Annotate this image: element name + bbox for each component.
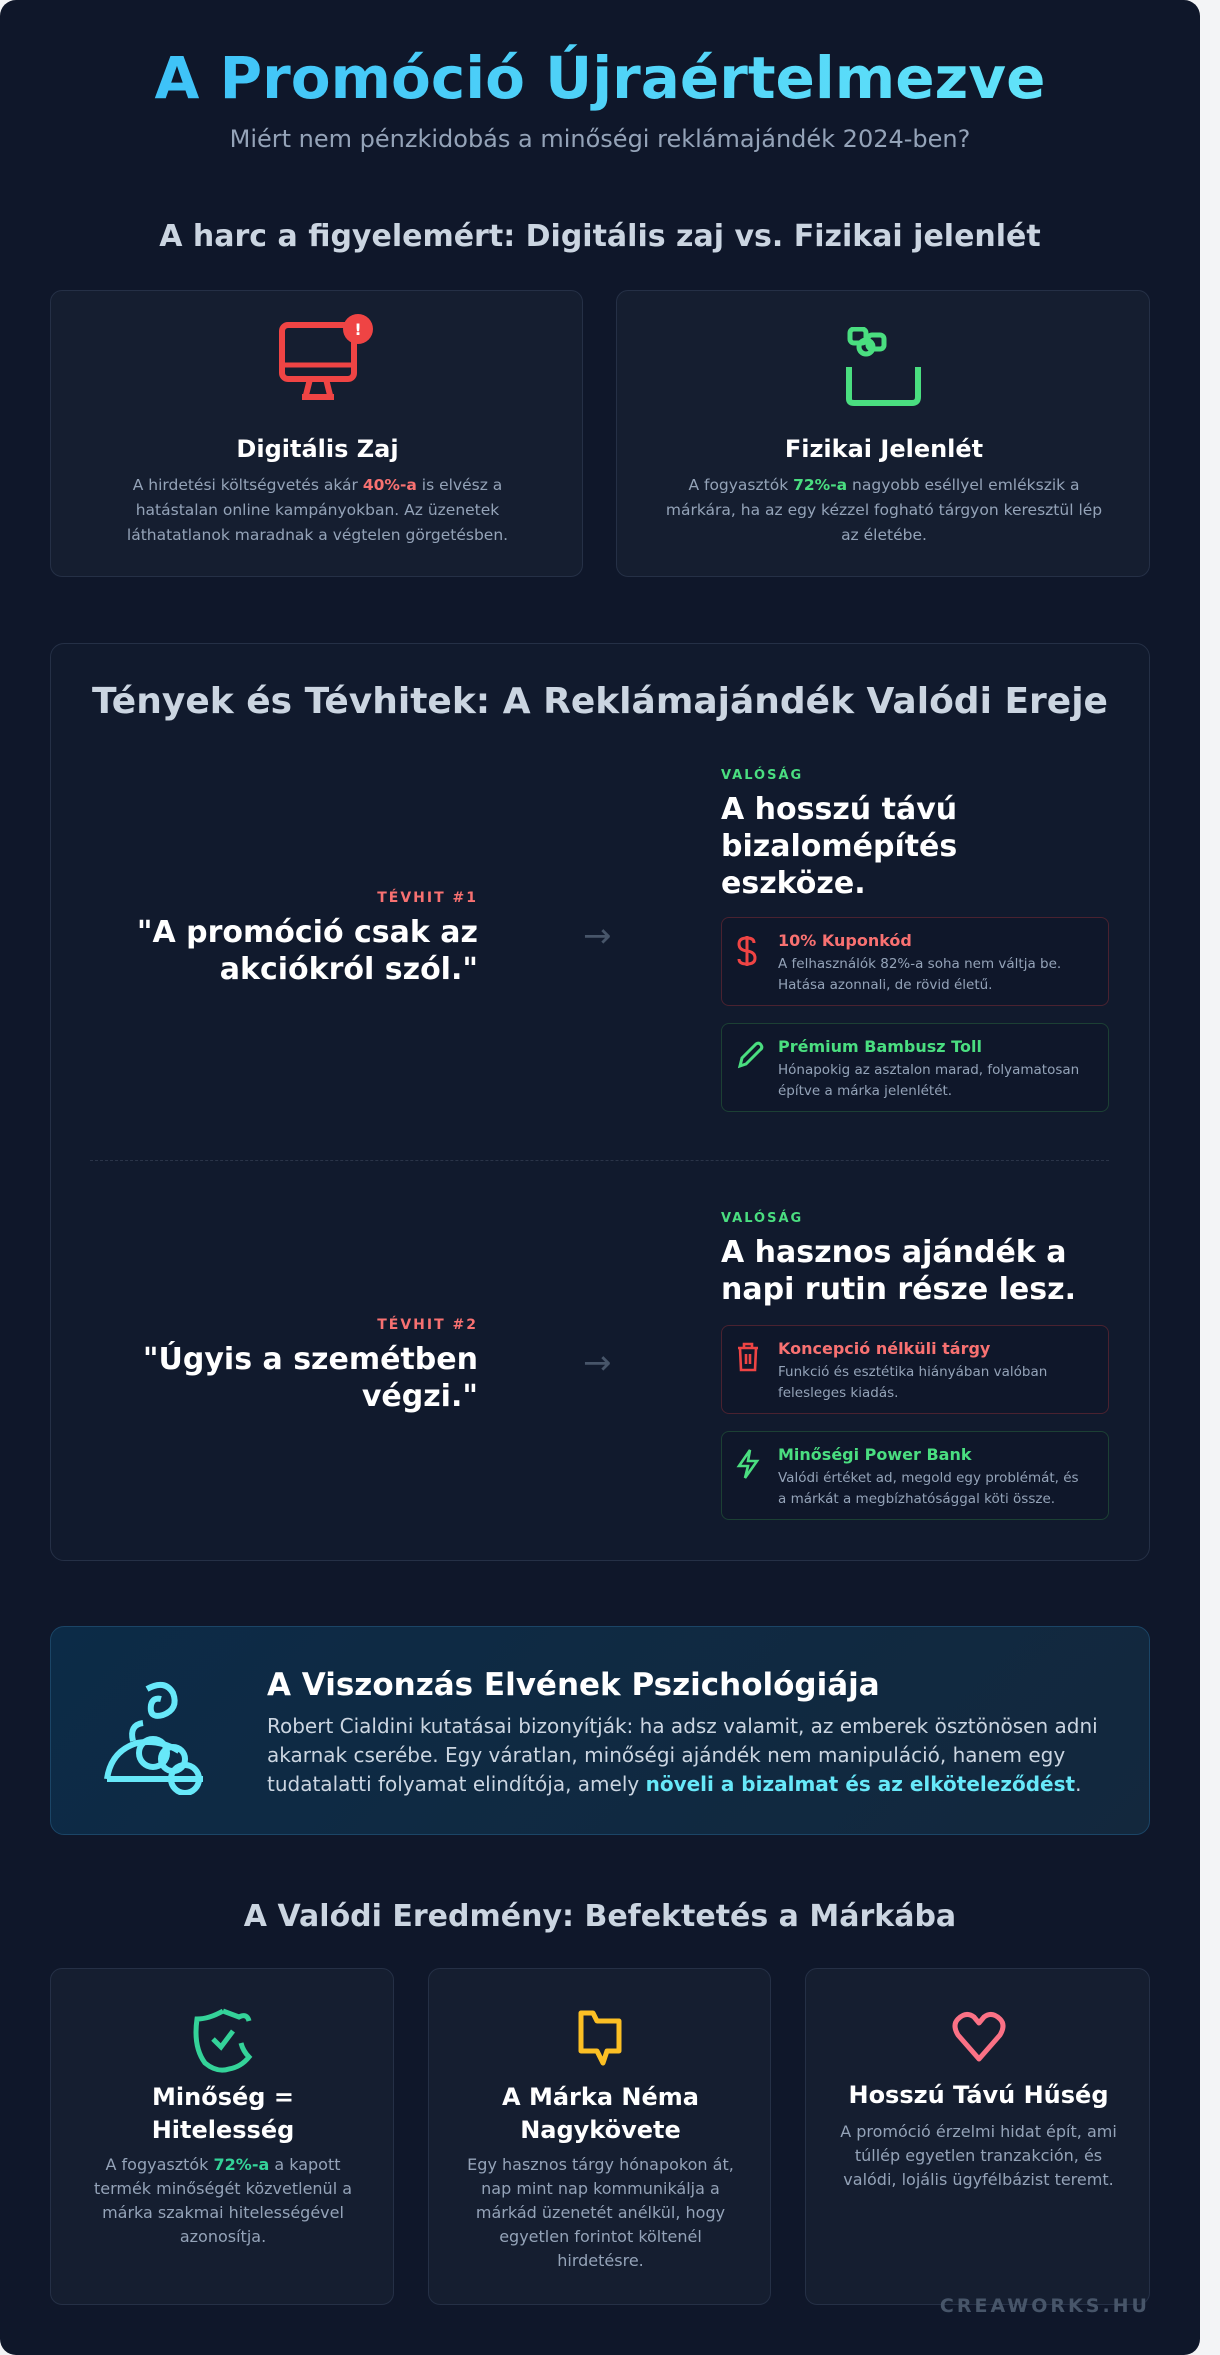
box: bamboo pen: Prémium Bambusz Toll: [778, 1037, 982, 1056]
box: coupon: [721, 917, 1109, 1006]
card: loyalty: A promóció érzelmi hidat épít, ami túllép egyetlen tranzakción, és valódi, lojális ügyfélbázist teremt.: [840, 2122, 1117, 2189]
icon: hand with object: [846, 327, 921, 406]
icon: shield check: [194, 2008, 252, 2073]
card: quality: A fogyasztók 72%-a a kapott termék minőségét közvetlenül a márka szakmai hitelességével azonosítja.: [94, 2155, 352, 2246]
card: ambassador: Egy hasznos tárgy hónapokon át, nap mint nap kommunikálja a márkád üzenetét anélkül, hogy egyetlen forintot költenél hirdetésre.: [467, 2155, 734, 2270]
myth 1: "A promóció csak az akciókról szól.": [137, 915, 478, 987]
box: trash: Funkció és esztétika hiányában valóban felesleges kiadás.: [778, 1364, 1047, 1401]
myth 1: TÉVHIT #1: [377, 890, 478, 906]
box: trash: Koncepció nélküli tárgy: [778, 1339, 990, 1358]
card: digital noise: [50, 290, 583, 577]
card title: A Márka Néma: [502, 2083, 699, 2111]
panel: reciprocity: [50, 1626, 1150, 1835]
card title: Nagykövete: [520, 2116, 681, 2144]
heading: attention battle: A harc a figyelemért: Digitális zaj vs. Fizikai jelenlét: [159, 219, 1041, 254]
card title: Minőség =: [152, 2083, 294, 2111]
box: bamboo pen: Hónapokig az asztalon marad, folyamatosan építve a márka jelenlétét.: [778, 1062, 1079, 1099]
box: power bank: Minőségi Power Bank: [778, 1445, 972, 1464]
icon: monitor alert: !: [354, 320, 362, 339]
title: A Promóció Újraértelmezve: [155, 44, 1045, 112]
box: coupon: 10% Kuponkód: [778, 931, 912, 950]
heading: results: A Valódi Eredmény: Befektetés a Márkába: [244, 1899, 956, 1934]
arrow 1: →: [583, 916, 612, 956]
card: physical presence: [616, 290, 1150, 577]
card: quality: [50, 1968, 394, 2305]
icon: heart: [952, 2012, 1006, 2062]
reciprocity title: A Viszonzás Elvének Pszichológiája: [267, 1667, 880, 1703]
arrow 2: →: [583, 1343, 612, 1383]
reality 2: A hasznos ajándék a napi rutin része lesz.: [721, 1235, 1076, 1307]
card title: [502, 2083, 699, 2144]
reciprocity text: Robert Cialdini kutatásai bizonyítják: ha adsz valamit, az emberek ösztönösen adni akarnak cserébe. Egy váratlan, minőségi ajándék nem manipuláció, hanem egy tudatalatti folyamat elindítója, amely növeli a bizalmat és az elköteleződést.: [267, 1714, 1098, 1796]
footer brand: CREAWORKS.HU: [940, 2295, 1150, 2317]
heading: facts and myths: Tények és Tévhitek: A Reklámajándék Valódi Ereje: [92, 681, 1108, 722]
myth 2: "Úgyis a szemétben végzi.": [143, 1342, 478, 1414]
icon: monitor alert: [279, 314, 373, 400]
card title: Digitális Zaj: [236, 435, 399, 463]
title: [0, 40, 1200, 116]
icon: gift hands: [104, 1682, 203, 1795]
icon: speech bubble: [578, 2010, 622, 2066]
card: ambassador: [428, 1968, 771, 2305]
panel: facts and myths: [50, 643, 1150, 1561]
reality 1: A hosszú távú bizalomépítés eszköze.: [721, 792, 957, 901]
reality 2: VALÓSÁG: [721, 1211, 803, 1226]
card text: A hirdetési költségvetés akár 40%-a is elvész a hatástalan online kampányokban. Az üzenetek láthatatlanok maradnak a végtelen görgetésben.: [127, 476, 508, 544]
card title: Hitelesség: [152, 2116, 294, 2144]
card: loyalty: [805, 1968, 1150, 2305]
box: trash: [721, 1325, 1109, 1414]
box: bamboo pen: [721, 1023, 1109, 1112]
box: coupon: A felhasználók 82%-a soha nem váltja be. Hatása azonnali, de rövid életű.: [778, 956, 1061, 993]
reality 1: VALÓSÁG: [721, 768, 803, 783]
subtitle: Miért nem pénzkidobás a minőségi reklámajándék 2024-ben?: [230, 125, 970, 153]
card text: A fogyasztók 72%-a nagyobb eséllyel emlékszik a márkára, ha az egy kézzel fogható tárgyon keresztül lép az életébe.: [666, 476, 1102, 544]
myth 2: TÉVHIT #2: [377, 1317, 478, 1333]
card title: [152, 2083, 294, 2144]
box: power bank: Valódi értéket ad, megold egy problémát, és a márkát a megbízhatósággal köti össze.: [778, 1470, 1079, 1507]
card title: Fizikai Jelenlét: [785, 435, 983, 463]
card title: Hosszú Távú Hűség: [848, 2081, 1109, 2109]
box: power bank: [721, 1431, 1109, 1520]
